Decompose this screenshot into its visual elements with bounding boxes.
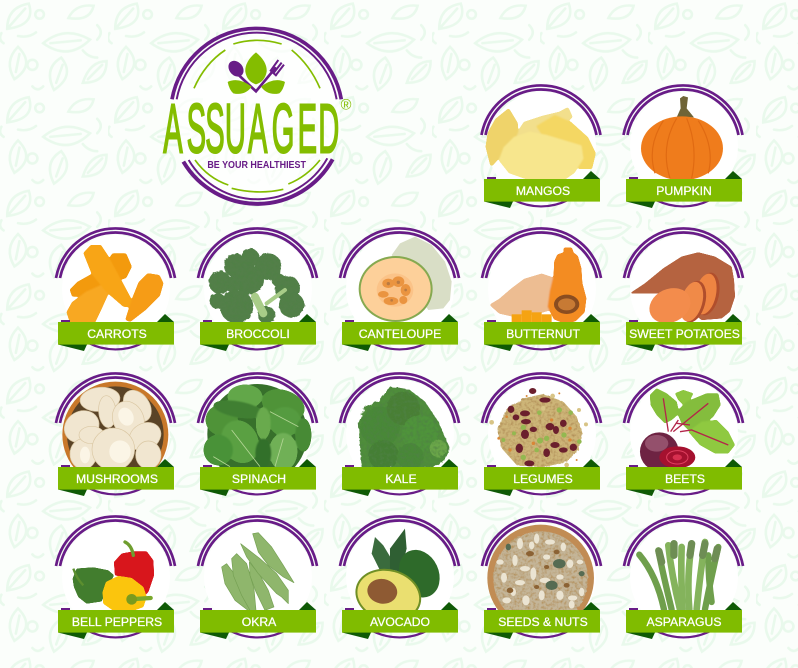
label: BELL PEPPERS bbox=[72, 615, 162, 629]
label: OKRA bbox=[242, 615, 277, 629]
label: PUMPKIN bbox=[656, 184, 712, 198]
card: mangos bbox=[482, 85, 600, 208]
logo wordmark: ASSUAGED bbox=[163, 91, 339, 168]
registered mark: ® bbox=[341, 97, 352, 113]
card: broccoli bbox=[198, 228, 317, 351]
card: sweet potatoes bbox=[624, 228, 743, 351]
card: asparagus bbox=[624, 516, 743, 639]
card: butternut bbox=[482, 228, 601, 351]
card: beets bbox=[624, 373, 743, 496]
label: BROCCOLI bbox=[226, 327, 290, 341]
label: MUSHROOMS bbox=[76, 472, 158, 486]
card: seeds and nuts bbox=[482, 516, 601, 639]
card: bell peppers bbox=[56, 516, 175, 639]
label: MANGOS bbox=[516, 184, 570, 198]
card: okra bbox=[198, 516, 317, 639]
label: AVOCADO bbox=[370, 615, 430, 629]
logo icon: leaves, spoon and fork bbox=[225, 52, 285, 94]
card: mushrooms bbox=[56, 373, 175, 496]
card: avocado bbox=[340, 516, 459, 639]
card: spinach bbox=[198, 373, 317, 496]
label: KALE bbox=[385, 472, 417, 486]
label: SWEET POTATOES bbox=[629, 327, 740, 341]
card: carrots bbox=[56, 228, 175, 351]
label: ASPARAGUS bbox=[647, 615, 721, 629]
label: SPINACH bbox=[232, 472, 286, 486]
label: BUTTERNUT bbox=[506, 327, 580, 341]
logo tagline: BE YOUR HEALTHIEST bbox=[207, 160, 306, 171]
label: BEETS bbox=[665, 472, 705, 486]
logo: Assuaged bbox=[163, 28, 352, 204]
label: CARROTS bbox=[87, 327, 147, 341]
card: pumpkin bbox=[624, 85, 742, 208]
card: legumes bbox=[482, 373, 601, 496]
card: canteloupe bbox=[340, 228, 459, 351]
card: kale bbox=[340, 373, 459, 496]
label: CANTELOUPE bbox=[359, 327, 441, 341]
label: LEGUMES bbox=[513, 472, 573, 486]
label: SEEDS & NUTS bbox=[498, 615, 588, 629]
